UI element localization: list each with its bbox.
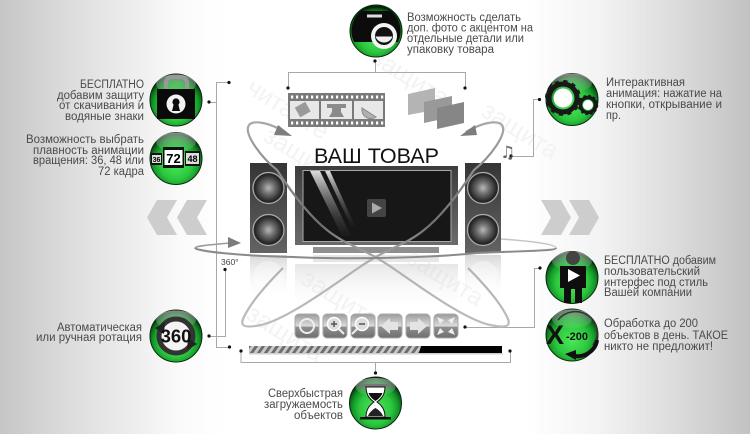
text: user interface: Вашей компании: [604, 287, 692, 299]
text: smoothness: плавность анимации: [33, 145, 144, 157]
text: fast loading: загружаемость: [264, 399, 343, 411]
button: frames: 72: [166, 151, 181, 166]
text: fast loading: Сверхбыстрая: [268, 388, 343, 400]
text: extra photo: отдельные детали или: [407, 33, 524, 45]
text: interactive animation: кнопки, открывание и: [606, 99, 722, 111]
button: x-200: [546, 309, 598, 361]
text: fast loading: [264, 388, 343, 422]
watermark text: защита: [367, 43, 454, 112]
text: user interface: интерфес под стиль: [604, 277, 708, 289]
text: protection: добавим защиту: [57, 90, 144, 102]
text: user interface: БЕСПЛАТНО добавим: [604, 255, 716, 267]
text: 200 objects: [604, 318, 728, 353]
text: smoothness: Возможность выбрать: [26, 134, 144, 146]
orbit behind: [195, 239, 556, 248]
watermark text: защита: [242, 299, 329, 368]
text: interactive animation: пр.: [606, 110, 621, 122]
button: rotation 360: 360: [161, 326, 191, 346]
text: 200 objects: никто не предложит!: [604, 341, 713, 353]
watermark text: [242, 43, 564, 368]
button: gears: [546, 74, 598, 126]
left chevrons: [147, 200, 207, 235]
text: rotation: [36, 322, 142, 344]
button: frames: 48: [187, 154, 198, 164]
photos stack: [408, 88, 464, 129]
button: frames: [150, 132, 202, 184]
text: extra photo: упаковку товара: [407, 44, 495, 56]
text: user interface: пользовательский: [604, 266, 700, 278]
text: protection: БЕСПЛАТНО: [80, 79, 144, 91]
360 degrees label: 360°: [221, 257, 239, 267]
progress bar: [249, 346, 503, 354]
text: extra photo: Возможность сделать: [407, 12, 521, 24]
text: interactive animation: [606, 77, 723, 122]
watermark text: защита: [297, 264, 384, 333]
TV: [295, 166, 458, 253]
button: hourglass: [350, 377, 402, 429]
text: smoothness: 72 кадра: [98, 166, 145, 178]
text: smoothness: вращения: 36, 48 или: [33, 155, 144, 167]
text: 200 objects: объектов в день. ТАКОЕ: [604, 330, 728, 342]
button: rotation 360: [150, 310, 202, 362]
watermark text: защита: [402, 243, 489, 312]
left speaker: [250, 163, 287, 253]
text: protection: от скачивания и: [59, 100, 144, 112]
button: user interface: [546, 251, 598, 304]
text: user interface: [604, 255, 716, 299]
button: x-200: -200: [566, 331, 588, 343]
text: fast loading: объектов: [294, 410, 343, 422]
text: 200 objects: Обработка до 200: [604, 318, 698, 330]
button: x-200: X: [546, 320, 564, 350]
control buttons: [295, 314, 458, 338]
music note icon: ♫: [500, 143, 515, 163]
text: interactive animation: анимация: нажатие на: [606, 88, 723, 100]
text: protection: [57, 79, 144, 123]
button: camera: [350, 4, 402, 58]
reflection of the product: [250, 255, 501, 312]
watermark text: защита: [259, 121, 346, 190]
text: extra photo: доп. фото с акцентом на: [407, 22, 534, 34]
button: lock: [150, 74, 202, 126]
text: extra photo: [407, 12, 534, 56]
film strip: [288, 93, 385, 127]
watermark text: читайте: [242, 73, 334, 145]
orbit arrowheads: [228, 125, 477, 248]
title: ВАШ ТОВАР: [314, 145, 439, 168]
connector lines: [209, 61, 540, 373]
text: interactive animation: Интерактивная: [606, 77, 685, 89]
orbit lines: [195, 122, 556, 327]
right speaker: [465, 163, 501, 253]
right chevrons: [541, 200, 599, 235]
button: frames: 36: [153, 157, 160, 164]
text: rotation: Автоматическая: [57, 322, 142, 334]
connector dots: [207, 59, 542, 375]
text: protection: водяные знаки: [65, 111, 144, 123]
watermark text: защита: [477, 96, 564, 165]
text: smoothness: [26, 134, 145, 178]
text: rotation: или ручная ротация: [36, 332, 142, 344]
